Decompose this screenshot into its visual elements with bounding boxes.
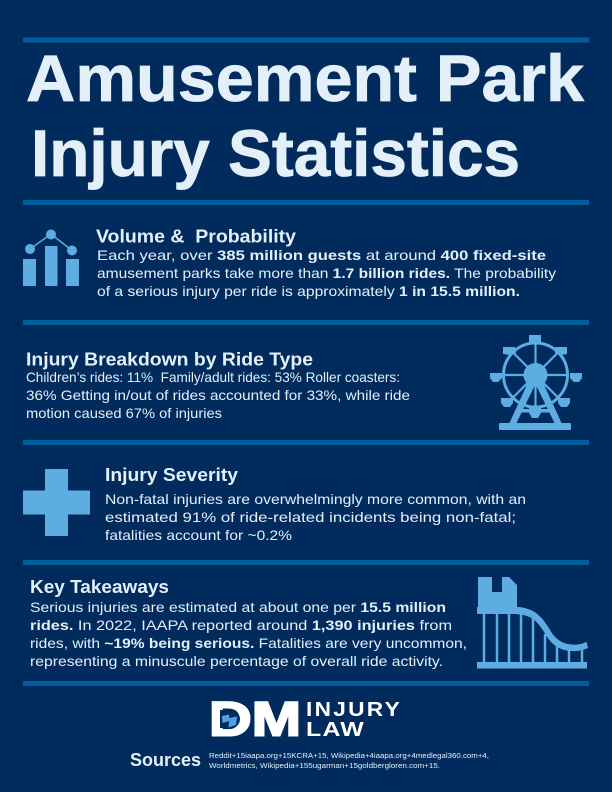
text: key takeaways: rides, with ~19% being serious. Fatalities are very uncommon, — [30, 635, 467, 651]
text: volume and probability: amusement parks take more than 1.7 billion rides. The probability — [97, 265, 556, 281]
icon: medical cross — [23, 469, 90, 536]
text: volume and probability: Each year, over 385 million guests at around 400 fixed-site — [97, 247, 546, 263]
text: injury breakdown: 36% Getting in/out of rides accounted for 33%, while ride — [26, 387, 410, 403]
text: key takeaways: rides. In 2022, IAAPA reported around 1,390 injuries from — [30, 617, 452, 633]
title: Injury Statistics — [31, 116, 520, 190]
text: injury breakdown: Children’s rides: 11% Family/adult rides: 53% Roller coasters: — [26, 369, 400, 385]
sources — [130, 750, 489, 770]
text: volume and probability: of a serious injury per ride is approximately 1 in 15.5 million. — [97, 283, 520, 299]
panel: injury severity — [23, 464, 526, 543]
icon: bar chart with trend line — [23, 230, 79, 286]
text: injury breakdown: motion caused 67% of injuries — [26, 405, 222, 421]
text: key takeaways — [30, 599, 467, 669]
title: Amusement Park — [26, 41, 584, 115]
title — [26, 41, 584, 190]
heading: key takeaways: Key Takeaways — [30, 576, 169, 597]
heading: injury severity: Injury Severity — [105, 464, 239, 485]
text: key takeaways: representing a minuscule percentage of overall ride activity. — [30, 653, 443, 669]
text: volume and probability — [97, 247, 556, 299]
heading: volume and probability: Volume & Probability — [96, 226, 297, 246]
icon: ferris wheel — [490, 335, 582, 430]
panel: volume and probability — [23, 226, 556, 299]
text: injury severity — [105, 491, 526, 543]
heading: injury breakdown: Injury Breakdown by Ride Type — [26, 348, 313, 370]
text: injury breakdown — [26, 369, 410, 421]
text: injury severity: Non-fatal injuries are overwhelmingly more common, with an — [105, 491, 526, 507]
sources: Worldmetrics, Wikipedia+155ugarman+15goldbergloren.com+15. — [209, 763, 440, 770]
icon: roller coaster — [477, 577, 588, 668]
panel: key takeaways — [30, 576, 588, 669]
text: key takeaways: Serious injuries are estimated at about one per 15.5 million — [30, 599, 446, 615]
sources: Reddit+15iaapa.org+15KCRA+15, Wikipedia+4iaapa.org+4medlegal360.com+4, — [209, 753, 489, 760]
logo: DM Injury Law: DM — [209, 694, 301, 746]
text: injury severity: fatalities account for ~0.2% — [105, 527, 292, 543]
panel: injury breakdown by ride type — [26, 335, 582, 430]
logo: DM Injury Law: LAW — [306, 719, 365, 741]
logo: DM Injury Law — [209, 694, 402, 746]
text: injury severity: estimated 91% of ride-related incidents being non-fatal; — [105, 509, 516, 525]
logo: DM Injury Law: INJURY — [306, 699, 402, 721]
sources: Sources — [130, 750, 201, 770]
